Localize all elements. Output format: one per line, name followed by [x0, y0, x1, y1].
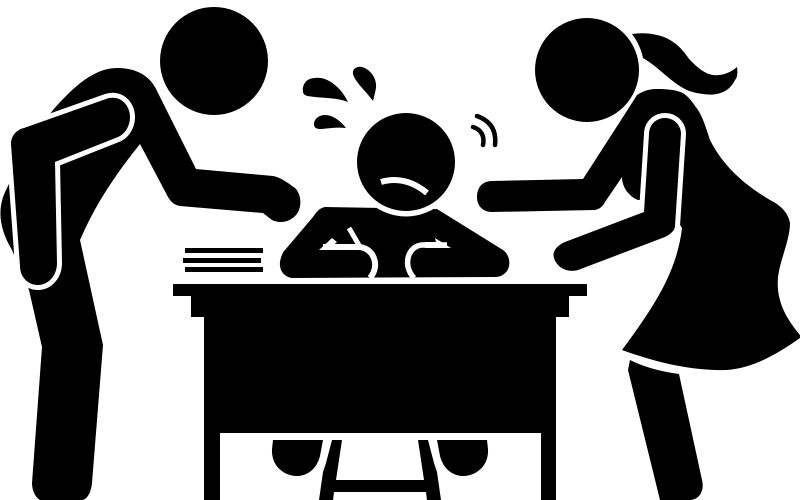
- student right knee: [437, 440, 488, 476]
- student body and arms: [280, 207, 509, 278]
- woman leg: [628, 360, 703, 500]
- sound waves: [473, 116, 495, 145]
- man back arm: [11, 98, 130, 285]
- figure: crying student: [280, 113, 509, 278]
- desk with chair and knees: [173, 284, 587, 500]
- student left arm outline: [319, 228, 375, 278]
- man head: [160, 7, 268, 115]
- figure: woman leaning over desk: [477, 18, 800, 500]
- figure: man leaning over desk: [0, 7, 300, 500]
- papers on desk: [183, 248, 263, 272]
- man body with pointing arm and leg: [0, 68, 300, 500]
- woman ponytail: [632, 33, 737, 95]
- woman back arm: [553, 118, 681, 271]
- student head: [357, 113, 455, 211]
- woman head: [535, 18, 639, 122]
- tear drops: [303, 67, 376, 129]
- student sad mouth: [381, 180, 427, 193]
- chair: [319, 440, 441, 500]
- student right arm outline: [408, 238, 451, 278]
- desk: [173, 284, 587, 500]
- student left knee: [272, 440, 323, 476]
- woman body, pointing arm and dress: [477, 89, 800, 370]
